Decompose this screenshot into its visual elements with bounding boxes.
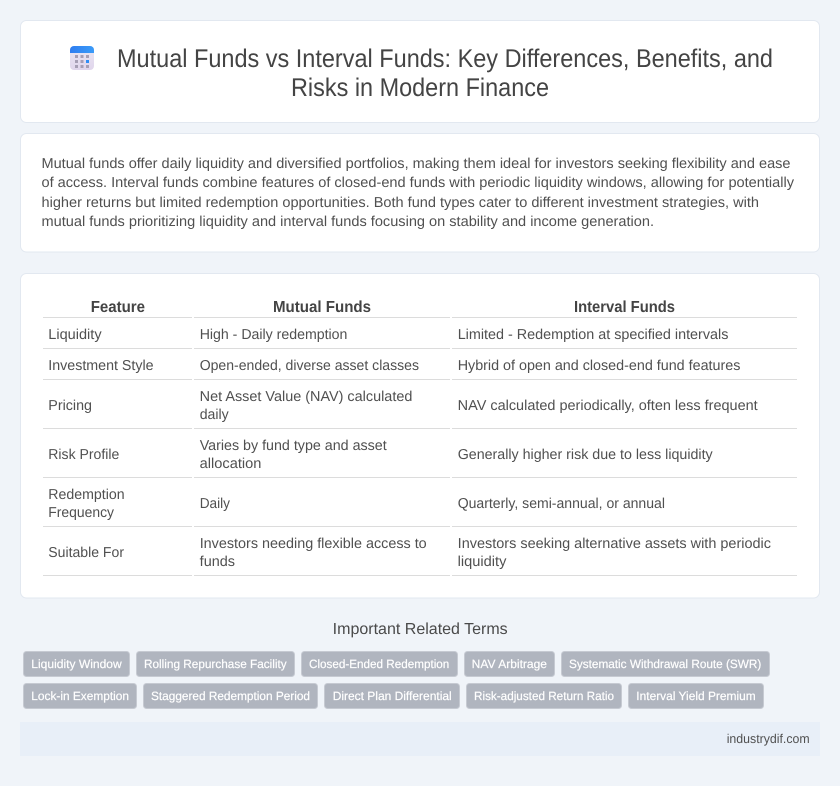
table header row xyxy=(91,299,675,316)
table header row: Feature xyxy=(91,299,145,316)
row: investment style: Investment Style xyxy=(48,358,154,374)
row: redemption frequency xyxy=(48,487,665,521)
text block: summary: of access. Interval funds combine features of closed-end funds with periodic liquidity windows, allowing for potentially xyxy=(42,175,795,191)
tag: nav arbitrage: NAV Arbitrage xyxy=(472,657,547,671)
row: redemption frequency: Redemption xyxy=(48,487,125,503)
row: pricing: NAV calculated periodically, often less frequent xyxy=(458,398,758,414)
row: risk profile xyxy=(48,438,713,472)
title: Risks in Modern Finance xyxy=(291,74,549,102)
row: risk profile: Varies by fund type and asset xyxy=(200,438,387,454)
tag: staggered redemption period xyxy=(144,684,318,708)
tag: interval yield premium: Interval Yield Premium xyxy=(636,689,756,703)
title: Mutual Funds vs Interval Funds: Key Differences, Benefits, and xyxy=(117,45,773,73)
heading: important related terms: Important Related Terms xyxy=(333,621,508,638)
row: liquidity: Liquidity xyxy=(48,327,102,343)
row: suitable for: Investors needing flexible access to xyxy=(200,536,427,552)
panel: summary paragraph xyxy=(20,134,820,252)
row: suitable for: Investors seeking alternative assets with periodic xyxy=(458,536,771,552)
tag: systematic withdrawal route: Systematic Withdrawal Route (SWR) xyxy=(569,657,761,671)
footer bar: industrydif.com xyxy=(727,731,810,746)
row: investment style: Hybrid of open and closed-end fund features xyxy=(458,358,740,374)
tag: risk-adjusted return ratio xyxy=(466,684,622,708)
row: suitable for: Suitable For xyxy=(48,545,124,561)
row: liquidity xyxy=(48,327,728,343)
row: liquidity: Limited - Redemption at specified intervals xyxy=(458,327,728,343)
panel: title card xyxy=(20,20,820,122)
row: pricing: Net Asset Value (NAV) calculated xyxy=(200,389,412,405)
tag: rolling repurchase facility: Rolling Repurchase Facility xyxy=(144,657,287,671)
table header row: Interval Funds xyxy=(574,299,675,316)
tag: nav arbitrage xyxy=(464,652,554,676)
text block: summary: Mutual funds offer daily liquidity and diversified portfolios, making them ideal for investors seeking flexibility and ease xyxy=(42,156,790,172)
row: suitable for: funds xyxy=(200,554,235,570)
icon: calendar xyxy=(70,46,94,70)
tag: closed-ended redemption: Closed-Ended Redemption xyxy=(309,657,449,671)
row: pricing: Pricing xyxy=(48,398,92,414)
row: investment style xyxy=(48,358,740,374)
tag: lock-in exemption xyxy=(24,684,136,708)
text block: summary: mutual funds prioritizing liquidity and interval funds focusing on stability and income generation. xyxy=(42,214,654,230)
row: redemption frequency: Daily xyxy=(200,496,231,512)
table header row: Mutual Funds xyxy=(273,299,371,316)
footer bar xyxy=(20,722,820,756)
row: risk profile: Generally higher risk due to less liquidity xyxy=(458,447,713,463)
row: pricing xyxy=(48,389,758,423)
tag: direct plan differential: Direct Plan Differential xyxy=(333,689,452,703)
tag list: related terms xyxy=(24,652,770,708)
row: suitable for xyxy=(48,536,771,570)
row: pricing: daily xyxy=(200,407,229,423)
tag: direct plan differential xyxy=(324,684,460,708)
tag: staggered redemption period: Staggered Redemption Period xyxy=(151,689,310,703)
row: risk profile: Risk Profile xyxy=(48,447,119,463)
row: redemption frequency: Frequency xyxy=(48,505,115,521)
row: investment style: Open-ended, diverse asset classes xyxy=(200,358,419,374)
row: risk profile: allocation xyxy=(200,456,261,472)
tag: liquidity window xyxy=(24,652,130,676)
tag: systematic withdrawal route xyxy=(562,652,770,676)
tag: liquidity window: Liquidity Window xyxy=(31,657,122,671)
text block: summary xyxy=(42,156,795,230)
row: suitable for: liquidity xyxy=(458,554,507,570)
text block: summary: higher returns but limited redemption opportunities. Both fund types cater to different investment strategies, with xyxy=(42,195,759,211)
tag: rolling repurchase facility xyxy=(136,652,294,676)
tag: closed-ended redemption xyxy=(302,652,458,676)
tag: interval yield premium xyxy=(628,684,764,708)
row: redemption frequency: Quarterly, semi-annual, or annual xyxy=(458,496,665,512)
panel: comparison table xyxy=(20,274,820,598)
row: liquidity: High - Daily redemption xyxy=(200,327,347,343)
tag: lock-in exemption: Lock-in Exemption xyxy=(31,689,129,703)
tag: risk-adjusted return ratio: Risk-adjusted Return Ratio xyxy=(474,689,614,703)
title xyxy=(117,45,773,102)
